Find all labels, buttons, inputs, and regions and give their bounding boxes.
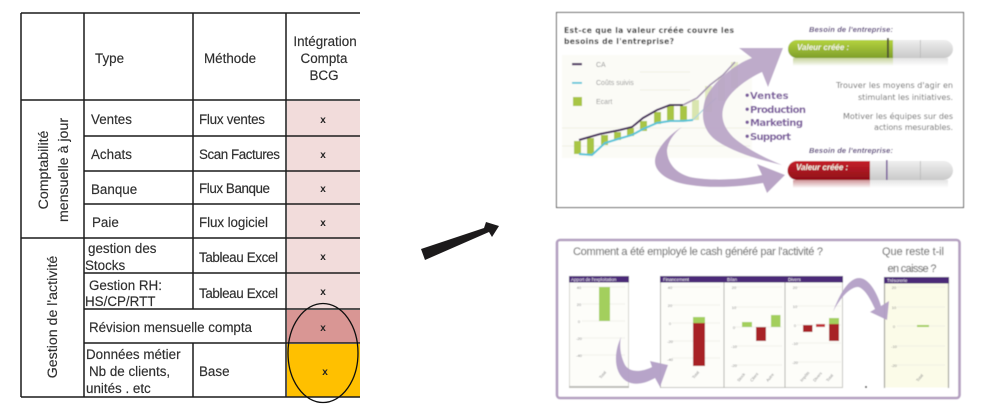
chart: apport de l'exploitation: -20 [576,336,583,341]
chart: apport de l'exploitation: 0 [578,319,581,324]
text: recommandations: Motiver les équipes sur des [843,111,953,121]
integration marks: x [322,367,328,378]
row labels: Achats [91,147,132,162]
row labels: Ventes [91,112,132,127]
gauge: valeur créée inférieure au besoin: Valeur créée : [796,163,849,172]
method labels: Flux ventes [199,112,265,127]
arrow: vers le financement [616,337,668,387]
chart: financement: Bilan [727,277,738,282]
panel: emploi du cash [557,240,960,398]
chart: financement: Total [691,370,700,380]
list: départements: • [744,105,750,116]
row labels: Nb de clients, [89,364,170,379]
chart: financement: -40 [667,357,674,362]
text: recommandations: Trouver les moyens d'agir en [835,81,953,90]
row labels: unités . etc [86,381,151,396]
chart: trésorerie: -20 [891,363,898,368]
row labels: Paie [92,215,119,230]
legend: CA [596,62,606,69]
row group label: gestion de l'activité: Gestion de l'activité [45,256,61,378]
column headers [95,34,357,83]
gauge: valeur créée supérieure au besoin: Valeur créée : [797,43,850,52]
chart: financement: Stock [736,372,746,383]
list: départements: • [744,118,750,129]
column headers: Compta [301,51,348,66]
chart: trésorerie: 0 [893,324,896,329]
line chart: CA, coûts and écart bars [562,62,750,155]
chart: trésorerie: -10 [891,344,898,349]
arrow: black arrow to dashboards [421,222,499,260]
row group label: comptabilité mensuelle à jour [36,118,72,222]
highlighted cells of the Intégration column [287,101,360,397]
gauge: valeur créée inférieure au besoin: Besoin de l'entreprise: [809,146,894,155]
chart: financement [660,276,843,388]
chart: financement: Autre [765,372,775,383]
column headers: BCG [309,68,339,83]
chart: financement: Client [749,371,760,383]
small dot [865,386,867,388]
method labels: Tableau Excel [199,286,278,301]
chart: financement: 10 [793,304,798,309]
column headers: Méthode [204,51,256,66]
row group label: comptabilité mensuelle à jour: mensuelle à jour [56,118,72,222]
integration marks: x [320,115,326,126]
list: départements [744,91,806,143]
chart: financement: Financement [663,277,690,282]
chart: apport de l'exploitation: Apport de l'exploitation [571,277,617,282]
panel question: trésorerie [882,246,944,275]
chart: financement: 0 [794,323,797,328]
chart: financement: Divers [788,277,802,282]
chart: financement: -20 [731,363,738,368]
method labels: Base [199,364,230,379]
table: intégration comptable [21,13,360,402]
chart: trésorerie: 20 [892,285,897,290]
row labels: Révision mensuelle compta [89,320,253,335]
chart: financement: 10 [732,305,737,310]
integration marks: x [320,150,326,161]
row labels: Gestion RH: [89,278,162,293]
column headers: Intégration [293,34,357,49]
chart: financement: -10 [792,341,799,346]
arrow: lower purple swoosh [655,127,785,193]
row group label: comptabilité mensuelle à jour: Comptabilité [36,130,52,209]
list: départements: • [744,91,750,102]
list: départements: Ventes [750,91,789,102]
integration marks: x [320,252,326,263]
panel question: trésorerie: en caisse ? [888,263,936,275]
arrow: vers la trésorerie [833,278,889,320]
legend: Coûts suivis [596,80,634,87]
line chart background [562,55,752,158]
row labels: gestion des [88,241,157,256]
chart: apport de l'exploitation: 40 [577,285,582,290]
panel question: emploi du cash: Comment a été employé le cash généré par l'activité ? [573,246,823,258]
integration marks: x [320,184,326,195]
panel title [564,26,734,46]
chart: trésorerie: Total [915,373,924,383]
chart: apport de l'exploitation [569,276,629,388]
chart: financement: 20 [793,285,798,290]
integration marks: x [320,323,326,334]
highlight ellipse [288,304,358,402]
list: départements: Marketing [750,118,803,129]
chart: financement: 0 [733,325,736,330]
legend [572,62,634,106]
row labels: Stocks [85,258,125,273]
table grid lines [21,13,360,397]
chart: financement: Impôts [799,370,810,383]
panel title: besoins de l'entreprise? [564,37,674,46]
method labels [199,112,280,379]
list: départements: • [744,132,750,143]
chart: trésorerie [884,277,949,388]
chart: apport de l'exploitation: 20 [577,302,582,307]
text: recommandations: stimulant les initiatives. [858,93,953,102]
integration marks [320,115,328,378]
arrow: upper purple swoosh [703,48,783,165]
text: recommandations: actions mesurables. [874,123,953,132]
gauge: valeur créée inférieure au besoin [788,146,953,188]
method labels: Flux Banque [199,181,270,196]
integration marks: x [320,287,326,298]
gauge: valeur créée supérieure au besoin: Besoin de l'entreprise: [809,25,894,34]
chart: financement: Total [825,373,834,383]
chart: financement: 20 [732,285,737,290]
chart: financement: -20 [792,360,799,365]
chart: financement: 0 [669,321,672,326]
chart: financement: 20 [668,303,673,308]
chart: financement: Divers [812,371,823,383]
legend: Ecart [596,99,612,106]
row labels: Banque [91,182,137,197]
list: départements: Production [750,105,806,116]
method labels: Flux logiciel [199,215,268,230]
integration marks: x [320,218,326,229]
panel: valeur créée [556,12,964,208]
method labels: Tableau Excel [199,250,278,265]
column headers: Type [95,51,124,66]
row labels: Données métier [86,347,181,362]
chart: apport de l'exploitation: Total [598,370,607,380]
row labels [85,112,253,396]
panel question: trésorerie: Que reste t-il [882,246,944,258]
row labels: HS/CP/RTT [85,294,155,309]
chart: trésorerie: 10 [892,305,897,310]
chart: trésorerie: Trésorerie [887,278,908,283]
chart: financement: -20 [667,339,674,344]
chart: apport de l'exploitation: -40 [576,353,583,358]
list: départements: Support [750,132,791,143]
panel title: Est-ce que la valeur créée couvre les [564,26,734,35]
text: recommandations [835,81,953,132]
chart: financement: -10 [731,344,738,349]
gauge: valeur créée supérieure au besoin [788,25,953,66]
chart: financement: 40 [668,285,673,290]
method labels: Scan Factures [199,147,280,162]
